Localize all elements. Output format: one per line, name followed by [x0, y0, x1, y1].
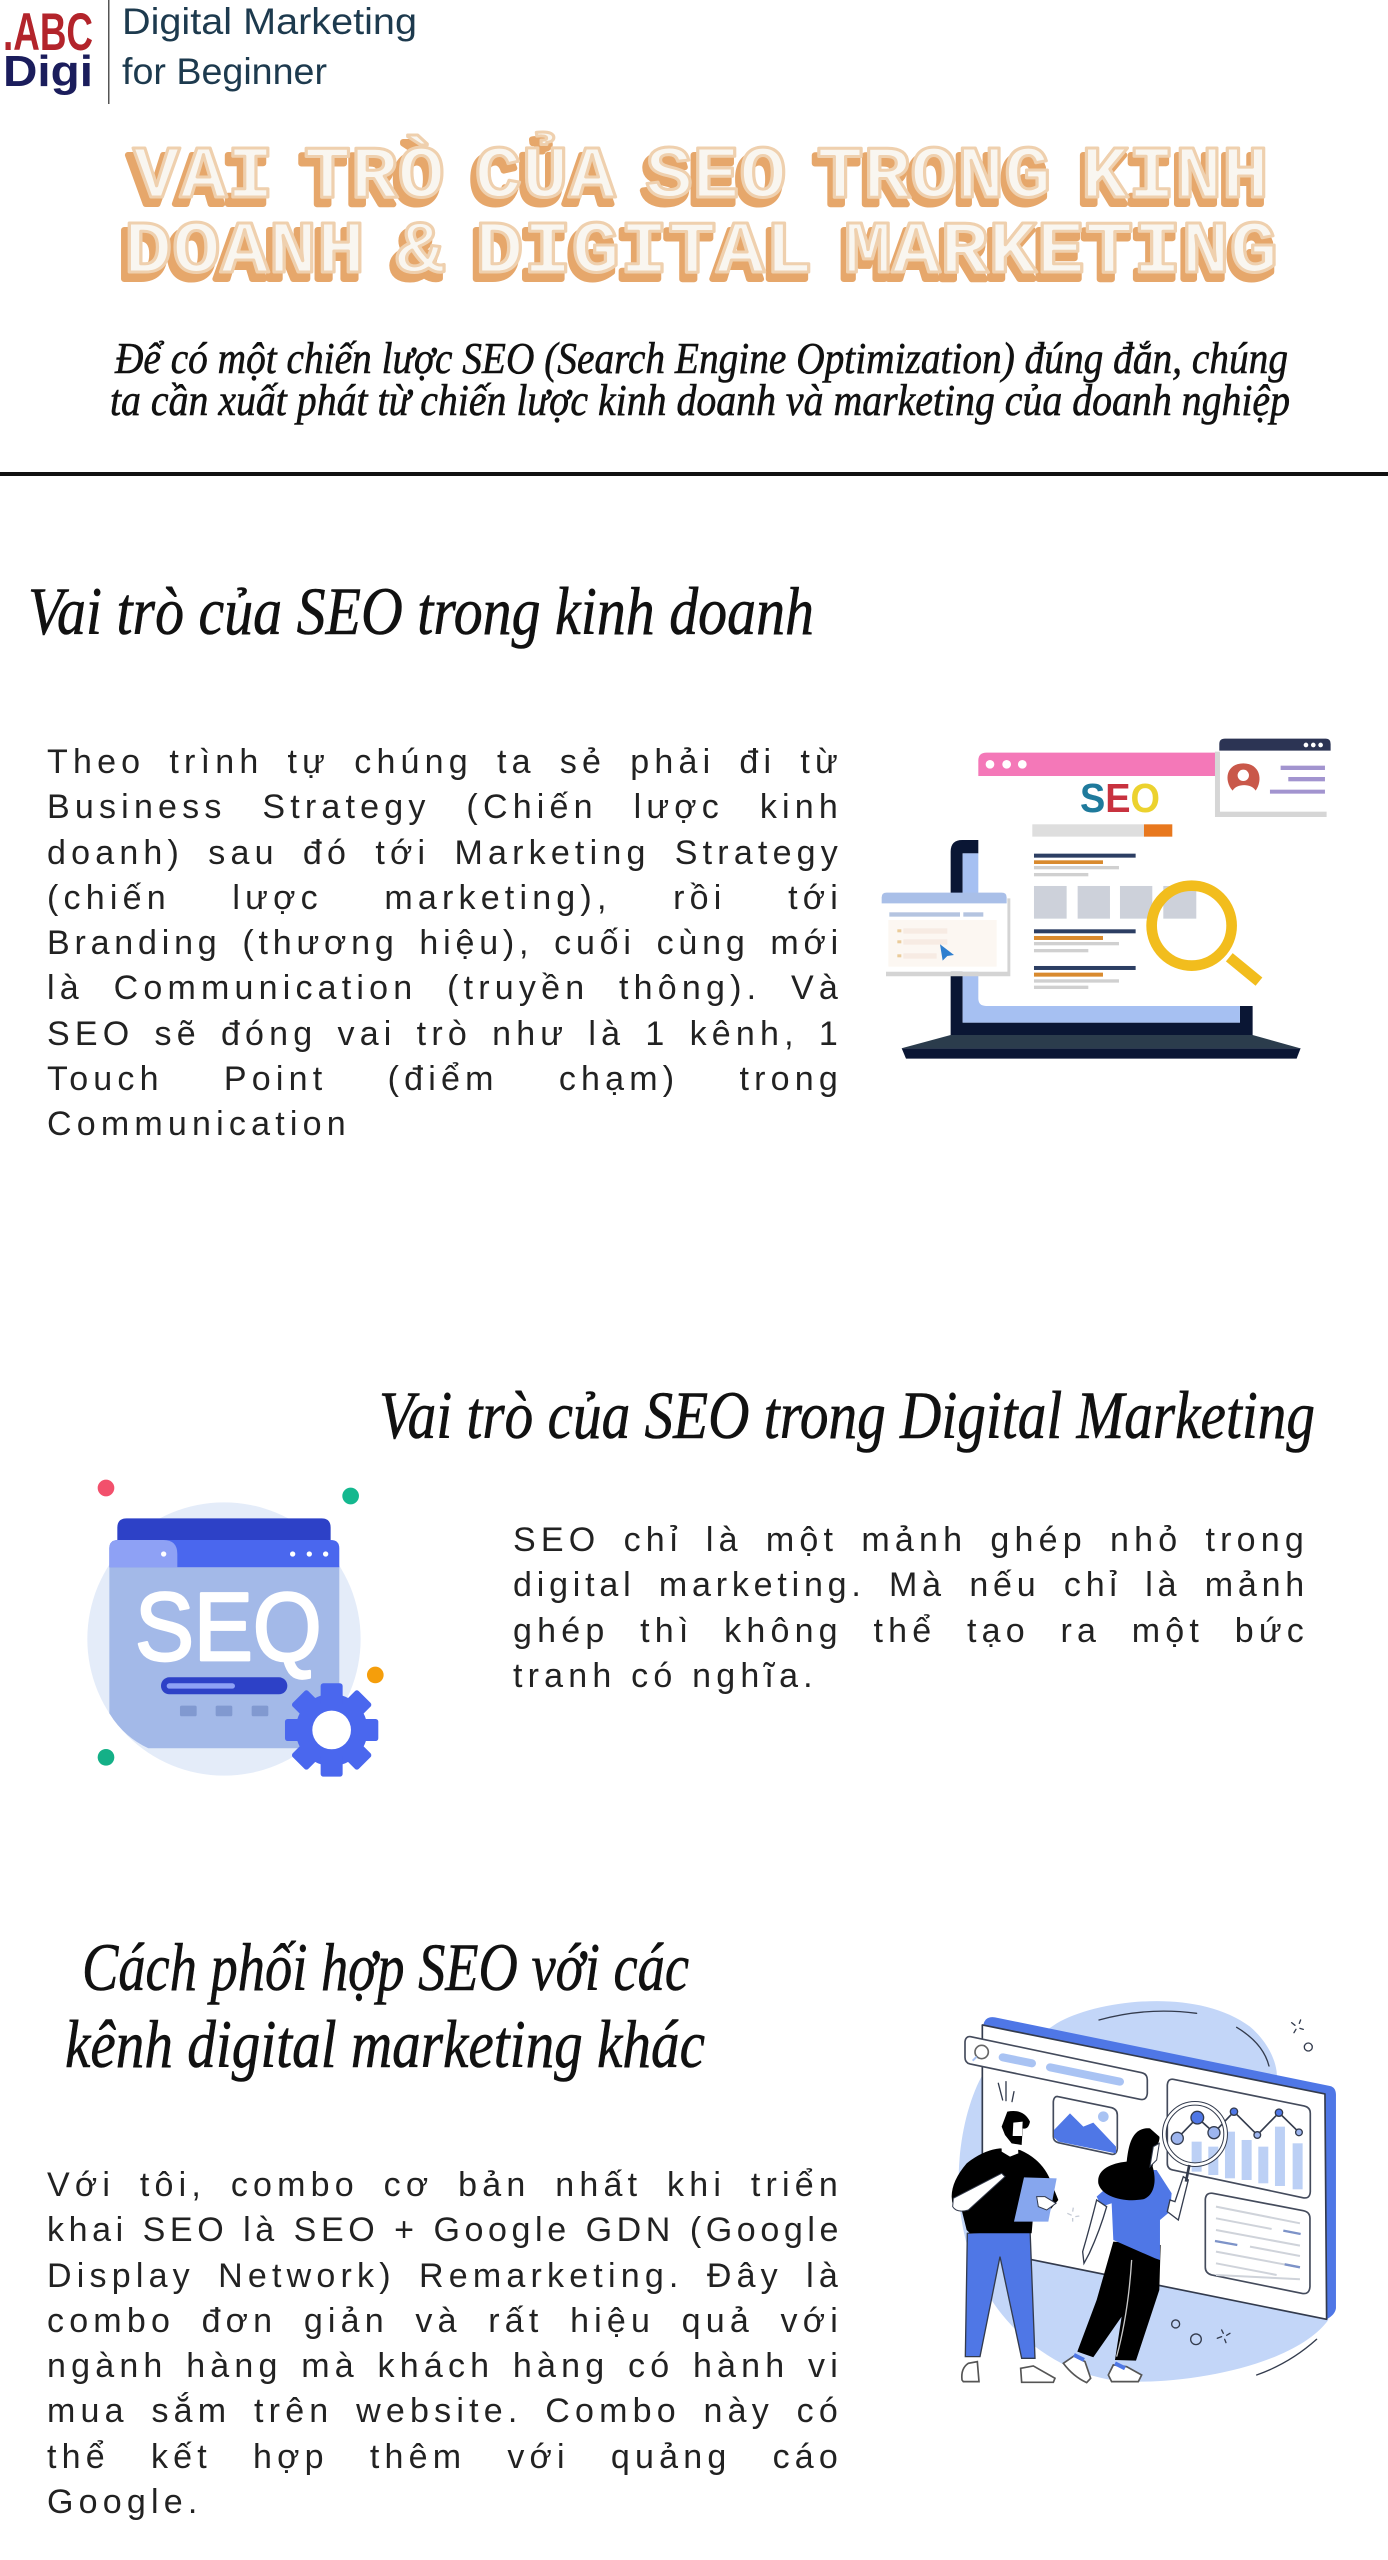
- title: VAI TRÒ CỦA SEO TRONG KINH: [133, 132, 1269, 220]
- text block: combining channels: Google.: [47, 2483, 202, 2521]
- SEO wordmark: SEO: [1080, 775, 1160, 821]
- dashboard board: [982, 2017, 1336, 2319]
- search bar: [965, 2037, 1147, 2100]
- text card: [1205, 2193, 1310, 2294]
- text block: role in digital marketing: [513, 1521, 1309, 1695]
- text block: role in business: Touch Point (điểm chạm) trong: [47, 1060, 843, 1098]
- text block: role in business: doanh) sau đó tới Marketing Strategy: [47, 834, 843, 872]
- subtitle: Để có một chiến lược SEO (Search Engine Optimization) đúng đắn, chúng: [114, 334, 1288, 383]
- text block: role in business: là Communication (truyền thông). Và: [47, 969, 843, 1007]
- decorative marks: [1099, 2011, 1317, 2375]
- illustration: SEO browser with gear: [87, 1480, 384, 1777]
- text block: role in business: Business Strategy (Chiến lược kinh: [47, 788, 843, 826]
- title: DOANH & DIGITAL MARKETING: [119, 218, 1275, 302]
- magnifier: [1164, 2103, 1226, 2182]
- logo: .ABC: [3, 3, 93, 62]
- logo: [3, 0, 417, 104]
- heading: combining SEO with channels: Cách phối hợp SEO với các: [82, 1929, 689, 2005]
- logo: for Beginner: [122, 51, 327, 92]
- text block: role in digital marketing: tranh có nghĩa.: [513, 1657, 818, 1695]
- text block: role in business: Communication: [47, 1105, 351, 1143]
- heading: combining SEO with channels: kênh digital marketing khác: [65, 2006, 705, 2082]
- text block: combining channels: ngành hàng mà khách hàng có hành vi: [47, 2347, 843, 2385]
- text block: combining channels: Display Network) Remarketing. Đây là: [47, 2257, 843, 2295]
- illustration: two people analysing dashboard: [952, 2001, 1336, 2383]
- sparkle: [1067, 2208, 1079, 2222]
- text block: role in digital marketing: ghép thì không thể tạo ra một bức: [513, 1612, 1309, 1650]
- profile window: [1215, 739, 1331, 817]
- logo: Digital Marketing: [122, 1, 417, 42]
- browser bar: [978, 753, 1222, 776]
- text block: combining channels: Với tôi, combo cơ bản nhất khi triển: [47, 2166, 843, 2204]
- text block: role in digital marketing: SEO chỉ là một mảnh ghép nhỏ trong: [513, 1521, 1309, 1559]
- browser window: SEQ: [135, 1574, 322, 1681]
- chart card: [1167, 2079, 1310, 2198]
- title: VAI TRÒ CỦA SEO TRONG KINH: [128, 139, 1266, 227]
- text block: role in digital marketing: digital marketing. Mà nếu chỉ là mảnh: [513, 1566, 1309, 1604]
- woman: [1063, 2128, 1188, 2383]
- text block: role in business: [47, 743, 843, 1143]
- image card: [1053, 2097, 1117, 2154]
- illustration: laptop with SEO page: [882, 739, 1331, 1059]
- search bar: [1032, 824, 1172, 837]
- search results: [1034, 854, 1196, 989]
- man: [952, 2082, 1058, 2382]
- text block: combining channels: [47, 2166, 843, 2521]
- browser window: [109, 1518, 339, 1748]
- subtitle: [110, 334, 1290, 425]
- text block: combining channels: mua sắm trên website. Combo này có: [47, 2392, 843, 2430]
- title: DOANH & DIGITAL MARKETING: [124, 211, 1278, 295]
- heading: combining SEO with channels: [65, 1929, 705, 2082]
- laptop screen frame: [902, 840, 1301, 1059]
- magnifying glass: [1152, 886, 1259, 982]
- text block: combining channels: combo đơn giản và rất hiệu quả với: [47, 2302, 843, 2340]
- background blob: [959, 2001, 1328, 2382]
- popup window with cursor: [882, 893, 1010, 976]
- heading: role in business: Vai trò của SEO trong kinh doanh: [28, 573, 814, 649]
- text block: combining channels: khai SEO là SEO + Google GDN (Google: [47, 2211, 843, 2249]
- text block: role in business: (chiến lược marketing), rồi tới: [47, 879, 843, 917]
- text block: role in business: Branding (thương hiệu), cuối cùng mới: [47, 924, 843, 962]
- text block: combining channels: thể kết hợp thêm với quảng cáo: [47, 2438, 843, 2476]
- logo: Digi: [3, 47, 93, 96]
- confetti dots: [98, 1480, 384, 1766]
- text block: role in business: Theo trình tự chúng ta sẻ phải đi từ: [47, 743, 843, 781]
- gear icon: [285, 1683, 378, 1777]
- text block: role in business: SEO sẽ đóng vai trò như là 1 kênh, 1: [47, 1015, 843, 1053]
- title: [119, 132, 1278, 302]
- subtitle: ta cần xuất phát từ chiến lược kinh doanh và marketing của doanh nghiệp: [110, 376, 1290, 425]
